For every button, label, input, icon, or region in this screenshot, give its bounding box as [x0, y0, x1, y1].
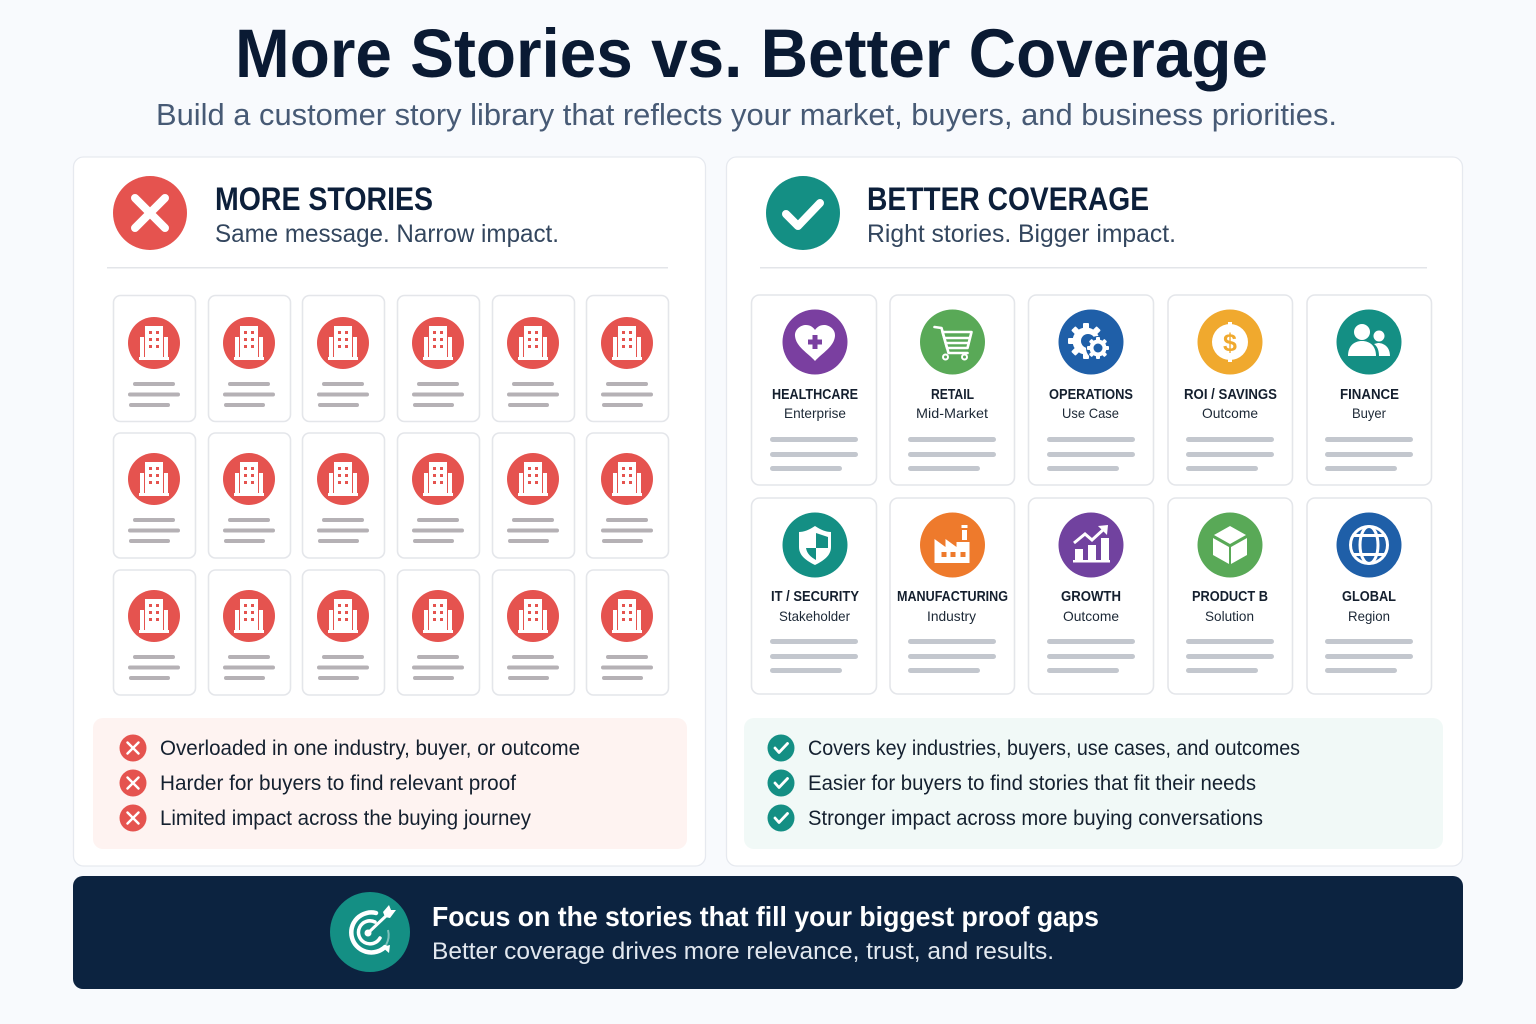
card: retail: RETAIL: [931, 387, 974, 403]
card: roi / savings: [1168, 295, 1292, 485]
card: growth: GROWTH: [1061, 589, 1121, 605]
subtitle: Build a customer story library that reflects your market, buyers, and business priorities.: [156, 97, 1337, 132]
card: finance: [1307, 295, 1432, 485]
title: More Stories vs. Better Coverage: [235, 15, 1268, 92]
card: operations: Use Case: [1062, 405, 1119, 421]
callout: benefits list: Covers key industries, buyers, use cases, and outcomes: [808, 736, 1300, 760]
card: roi / savings: Outcome: [1202, 405, 1258, 421]
card: healthcare: [752, 295, 876, 485]
card: growth: [1028, 498, 1154, 694]
callout: benefits list: Stronger impact across more buying conversations: [808, 806, 1263, 830]
card: finance: FINANCE: [1340, 387, 1399, 403]
card: product b: [1168, 498, 1292, 694]
card: finance: Buyer: [1352, 405, 1386, 421]
card: retail: [890, 295, 1014, 485]
panel: better coverage: [726, 157, 1462, 866]
card: manufacturing: Industry: [927, 608, 976, 624]
callout: drawbacks list: Overloaded in one industry, buyer, or outcome: [160, 736, 580, 760]
card: global: [1307, 498, 1432, 694]
card: global: GLOBAL: [1342, 589, 1396, 605]
heading: more stories: MORE STORIES: [215, 181, 433, 217]
callout: drawbacks list: Limited impact across the buying journey: [160, 806, 531, 830]
card: it / security: Stakeholder: [779, 608, 850, 624]
banner subtext: Better coverage drives more relevance, trust, and results.: [432, 938, 1054, 965]
card: manufacturing: MANUFACTURING: [897, 589, 1008, 605]
card: roi / savings: $: [1223, 329, 1237, 357]
subheading: better coverage: Right stories. Bigger impact.: [867, 220, 1176, 248]
banner heading: Focus on the stories that fill your biggest proof gaps: [432, 901, 1099, 932]
card: global: Region: [1348, 608, 1390, 624]
heading: better coverage: BETTER COVERAGE: [867, 181, 1149, 217]
callout: drawbacks list: [93, 718, 687, 849]
card: operations: [1028, 295, 1154, 485]
card: manufacturing: [890, 498, 1014, 694]
card: healthcare: HEALTHCARE: [772, 387, 858, 403]
story card grid: identical red cards: [114, 296, 668, 695]
banner: takeaway: [73, 876, 1463, 989]
icon: target: [330, 892, 410, 972]
subheading: more stories: Same message. Narrow impact.: [215, 220, 559, 248]
callout: benefits list: [744, 718, 1443, 849]
card: it / security: [752, 498, 876, 694]
icon: teal check: [766, 176, 840, 250]
callout: benefits list: Easier for buyers to find stories that fit their needs: [808, 771, 1256, 795]
card: product b: PRODUCT B: [1192, 589, 1268, 605]
card: roi / savings: ROI / SAVINGS: [1184, 387, 1277, 403]
callout: drawbacks list: Harder for buyers to find relevant proof: [160, 771, 516, 795]
card: product b: Solution: [1205, 608, 1254, 624]
card: it / security: IT / SECURITY: [771, 589, 859, 605]
card: growth: Outcome: [1063, 608, 1119, 624]
card: healthcare: Enterprise: [784, 405, 846, 421]
panel: more stories: [74, 157, 706, 866]
icon: red cross: [113, 176, 187, 250]
card: operations: OPERATIONS: [1049, 387, 1133, 403]
card: retail: Mid-Market: [916, 405, 988, 421]
